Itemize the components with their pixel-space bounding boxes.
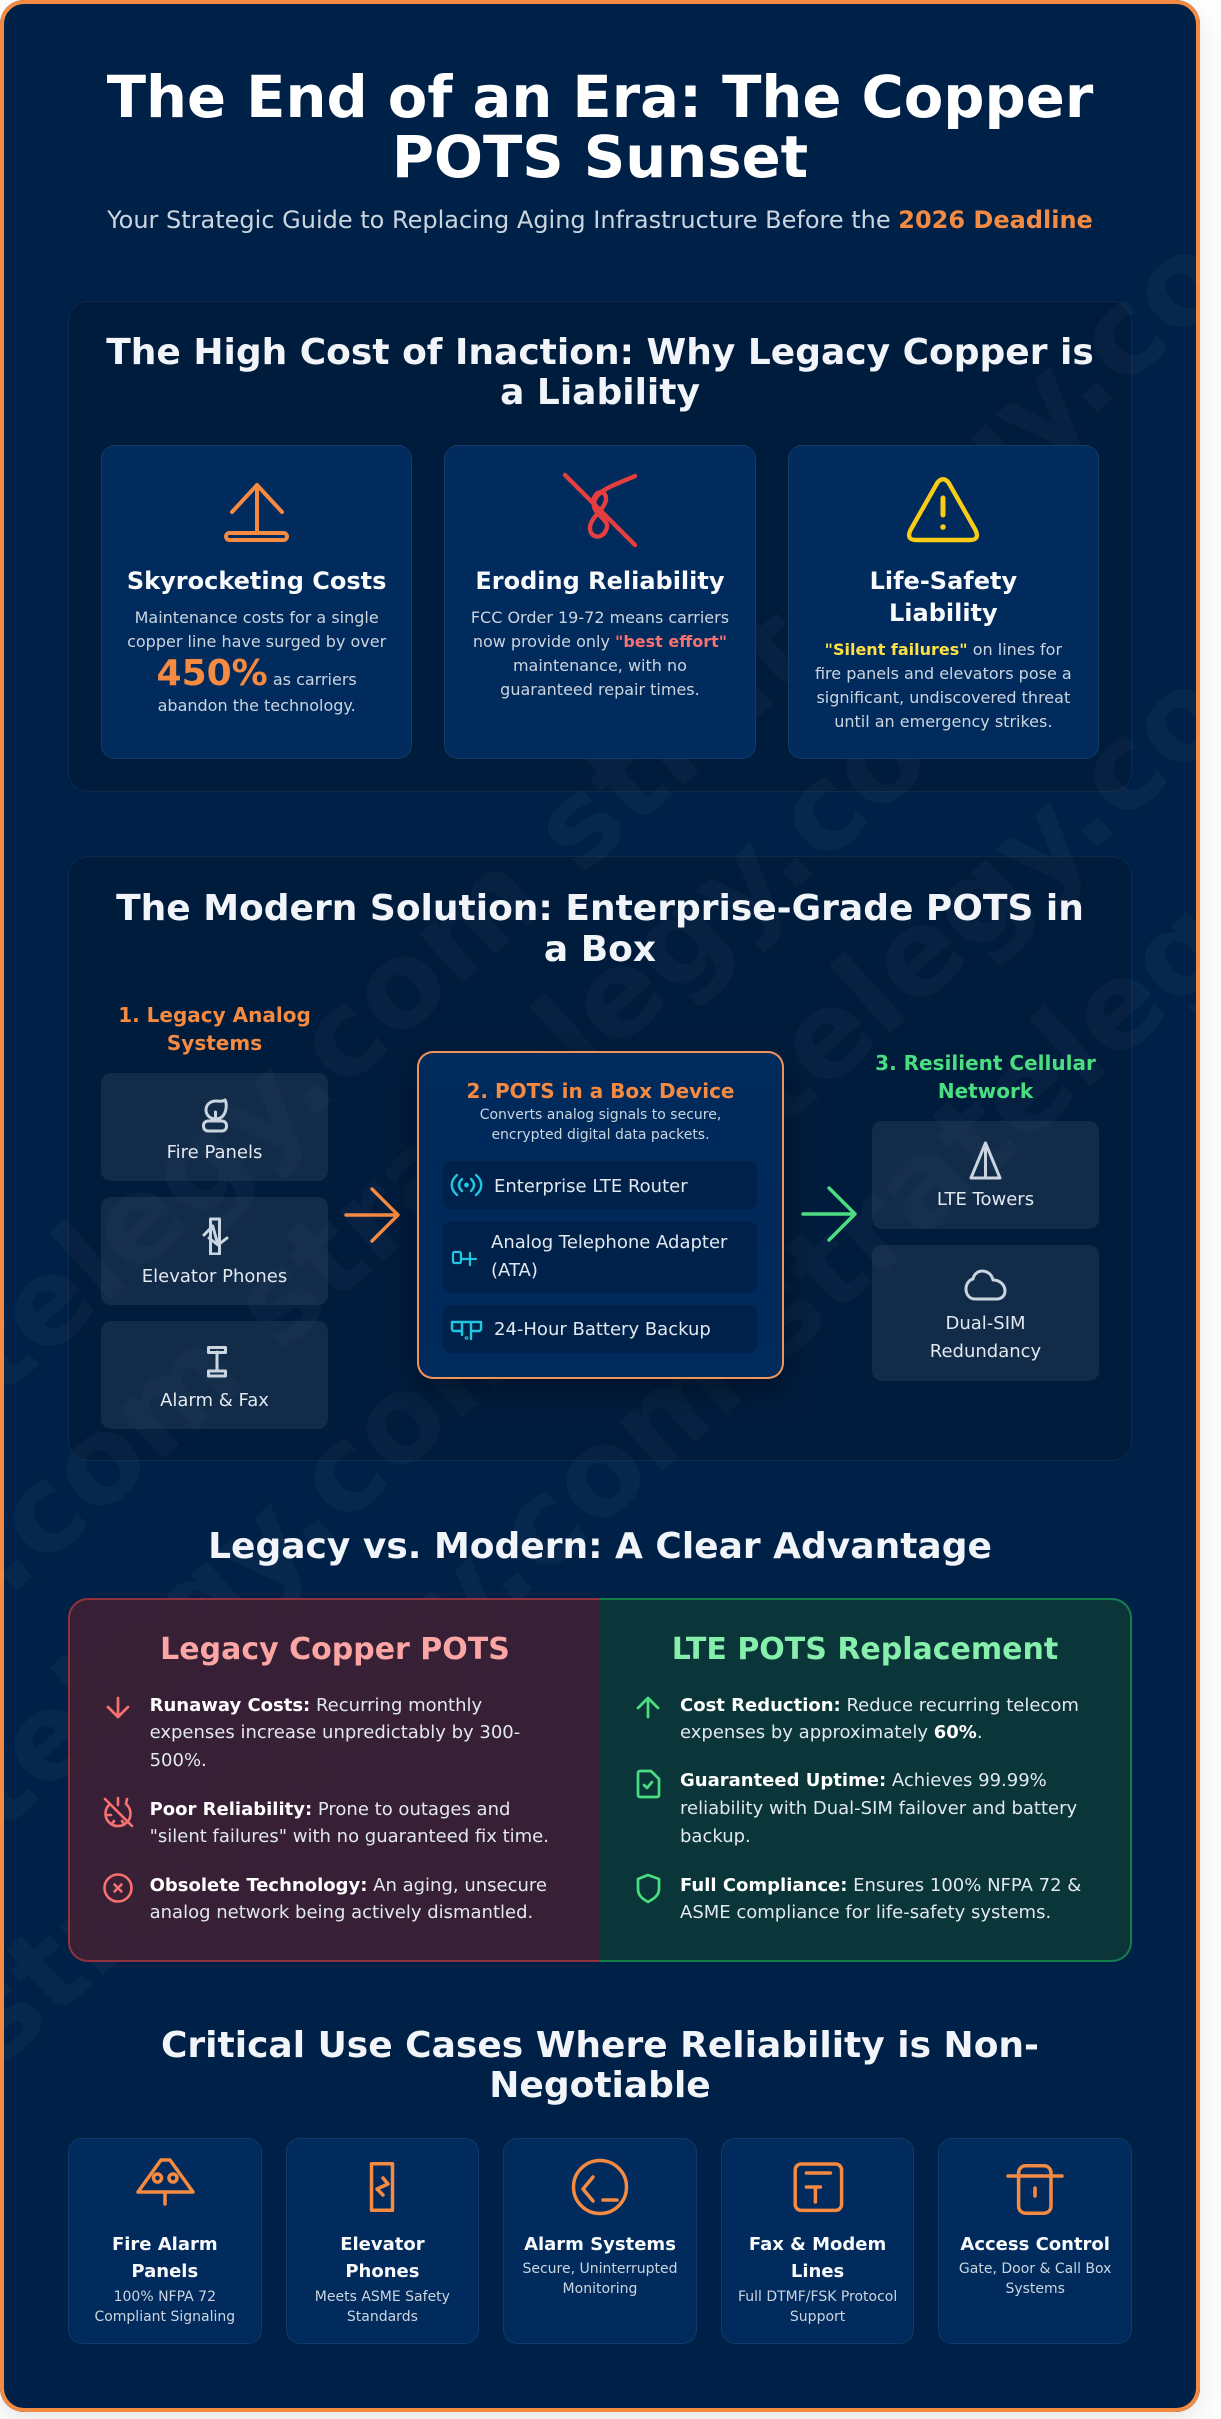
card text (938, 2259, 1132, 2299)
label: LTE Towers (937, 1189, 1034, 1210)
heading: critical use cases: Negotiable (489, 2064, 711, 2106)
row label: Enterprise LTE Router (494, 1176, 688, 1196)
heading: The High Cost of Inaction: Why Legacy Copper is (106, 332, 1094, 373)
item: runaway costs (150, 1695, 520, 1771)
heading: critical use cases (0, 2026, 1200, 2106)
row: ATA (443, 1221, 757, 1293)
item: full compliance (680, 1872, 1081, 1927)
subtitle: Your Strategic Guide to Replacing Aging Infrastructure Before the 2026 Deadline (107, 206, 1093, 234)
box: LTE towers (872, 1121, 1099, 1229)
icon: warning triangle (906, 477, 980, 542)
item: cost reduction: expenses by approximately 60%. (680, 1722, 983, 1743)
label: Alarm & Fax (160, 1390, 269, 1410)
card: alarm systems (503, 2138, 697, 2344)
card: fire alarm panels (68, 2138, 262, 2344)
heading: a Liability (500, 372, 700, 413)
heading (116, 888, 1084, 970)
card text: until an emergency strikes. (834, 712, 1052, 731)
card title: Lines (791, 2261, 844, 2282)
panel: use cases (68, 2138, 1132, 2344)
card title: Liability (889, 599, 998, 627)
icon: elevator (202, 1218, 229, 1255)
icon: upload arrow (224, 482, 289, 542)
column heading: resilient cellular network (875, 1051, 1096, 1103)
icon: x circle (103, 1873, 133, 1903)
item: poor reliability: Poor Reliability: Prone to outages and (150, 1799, 510, 1820)
icon: cloud (964, 1270, 1006, 1300)
column heading: legacy analog systems (118, 1003, 311, 1055)
item: runaway costs: expenses increase unpredictably by 300- (150, 1722, 520, 1743)
stat: 450%: 450% as carriers (157, 652, 357, 694)
item: obsolete technology (150, 1875, 547, 1923)
item: guaranteed uptime: Guaranteed Uptime: Achieves 99.99% (680, 1770, 1047, 1791)
label: Dual-SIM (945, 1313, 1026, 1334)
header (107, 64, 1094, 234)
column heading: legacy analog systems: Systems (167, 1031, 262, 1055)
arrow: device to network (801, 1186, 857, 1242)
card title: Access Control (960, 2234, 1110, 2254)
box: alarm and fax (101, 1321, 328, 1429)
item: obsolete technology: analog network being actively dismantled. (150, 1902, 533, 1923)
row label: Analog Telephone Adapter (491, 1232, 727, 1253)
icon: adapter (452, 1250, 478, 1266)
card title (721, 2230, 914, 2286)
card text: now provide only "best effort" (473, 632, 727, 651)
icon: down arrow (106, 1696, 130, 1718)
title (107, 64, 1094, 191)
row: LTE router (443, 1161, 757, 1209)
card: access control (938, 2138, 1132, 2344)
card text: 100% NFPA 72 (114, 2289, 216, 2305)
panel: comparison (68, 1598, 1132, 1962)
card text: Meets ASME Safety (315, 2289, 450, 2305)
card title: Fax & Modem (749, 2234, 886, 2254)
item: obsolete technology: Obsolete Technology: An aging, unsecure (150, 1875, 547, 1896)
card: eroding reliability (444, 445, 756, 759)
arrow: legacy to device (344, 1187, 400, 1243)
icon: elevator phone (350, 2154, 414, 2218)
card text: Systems (1005, 2281, 1065, 2297)
item: runaway costs: Runaway Costs: Recurring monthly (150, 1695, 482, 1716)
item: full compliance: ASME compliance for life-safety systems. (680, 1902, 1051, 1923)
item: guaranteed uptime (680, 1770, 1077, 1847)
title: The End of an Era: The Copper (107, 64, 1093, 130)
card text: copper line have surged by over (127, 632, 386, 651)
card text: fire panels and elevators pose a (815, 664, 1072, 683)
card text: Support (790, 2309, 845, 2325)
device description: Converts analog signals to secure, (480, 1107, 721, 1123)
card title: Fire Alarm (112, 2234, 218, 2254)
box: fire panels (101, 1073, 328, 1181)
card text: Monitoring (563, 2281, 637, 2297)
card title: Skyrocketing Costs (127, 567, 386, 595)
item: guaranteed uptime: reliability with Dual-SIM failover and battery (680, 1798, 1077, 1819)
column: legacy copper POTS (68, 1598, 600, 1962)
card text: FCC Order 19-72 means carriers (471, 608, 729, 626)
card text (721, 2287, 914, 2327)
title: POTS Sunset (392, 124, 808, 191)
box: dual-SIM redundancy (872, 1245, 1099, 1381)
card text: "Silent failures" on lines for (825, 640, 1062, 658)
card text (286, 2287, 479, 2327)
column heading: resilient cellular network: 3. Resilient Cellular (875, 1051, 1096, 1075)
icon: shield (636, 1874, 660, 1904)
heading (106, 332, 1094, 413)
item: cost reduction: Cost Reduction: Reduce recurring telecom (680, 1695, 1079, 1716)
row label: 24-Hour Battery Backup (494, 1319, 711, 1340)
row: battery backup (443, 1305, 757, 1353)
icon: battery (450, 1320, 482, 1340)
card text (471, 608, 729, 699)
heading: critical use cases: Critical Use Cases Where Reliability is Non- (161, 2024, 1039, 2066)
icon: checked document (636, 1770, 660, 1798)
row label: (ATA) (491, 1260, 538, 1281)
card text: Secure, Uninterrupted (522, 2261, 678, 2277)
card text (127, 608, 386, 651)
icon: fax (786, 2154, 850, 2218)
device description: encrypted digital data packets. (491, 1127, 710, 1143)
icon: terminal circle (568, 2154, 632, 2218)
card: fax and modem lines (721, 2138, 914, 2344)
card title: Panels (131, 2261, 198, 2282)
icon: broken knot (562, 472, 638, 548)
box: elevator phones (101, 1197, 328, 1305)
card text: Gate, Door & Call Box (959, 2261, 1111, 2277)
heading: a Box (544, 928, 656, 970)
icon: tower (970, 1142, 1002, 1180)
item: guaranteed uptime: backup. (680, 1826, 751, 1847)
card text (815, 640, 1072, 731)
icon: broken gauge (104, 1796, 134, 1828)
icon: fire alarm (133, 2154, 197, 2218)
card title (286, 2230, 479, 2286)
card text: maintenance, with no (513, 656, 687, 675)
icon: access gate (1003, 2154, 1067, 2218)
card title: Phones (345, 2261, 419, 2282)
item: full compliance: Full Compliance: Ensures 100% NFPA 72 & (680, 1875, 1081, 1896)
panel: high cost of inaction (68, 301, 1132, 792)
item: poor reliability: "silent failures" with no guaranteed fix time. (150, 1826, 549, 1847)
device description (480, 1107, 721, 1143)
column heading: legacy analog systems: 1. Legacy Analog (118, 1003, 311, 1027)
panel: pots in a box device (417, 1051, 784, 1379)
column title: Legacy Copper POTS (160, 1632, 510, 1666)
panel: modern solution (68, 856, 1132, 1461)
row label (491, 1232, 728, 1281)
device title: 2. POTS in a Box Device (466, 1078, 734, 1102)
card: skyrocketing costs (101, 445, 412, 759)
column title: LTE POTS Replacement (672, 1632, 1058, 1666)
card: elevator phones (286, 2138, 479, 2344)
card text: guaranteed repair times. (500, 680, 700, 699)
card text: Standards (347, 2309, 418, 2325)
column: LTE POTS replacement (600, 1598, 1132, 1962)
card text end: abandon the technology. (158, 696, 356, 715)
card title: Alarm Systems (524, 2234, 676, 2254)
card text: Maintenance costs for a single (135, 608, 379, 626)
heading: The Modern Solution: Enterprise-Grade POTS in (116, 888, 1084, 929)
card text: significant, undiscovered threat (816, 688, 1070, 707)
heading: legacy vs modern: Legacy vs. Modern: A Clear Advantage (208, 1526, 992, 1567)
card title: Life-Safety (870, 567, 1017, 595)
card title: Eroding Reliability (475, 567, 725, 595)
item: cost reduction (680, 1695, 1079, 1743)
card title: Elevator (340, 2234, 425, 2254)
icon: alarm (207, 1346, 227, 1378)
icon: antenna (450, 1174, 482, 1196)
item: poor reliability (150, 1799, 549, 1847)
card title (68, 2230, 262, 2286)
card text: Full DTMF/FSK Protocol (738, 2289, 897, 2305)
card: life-safety liability (788, 445, 1099, 759)
label: Fire Panels (167, 1142, 262, 1162)
label: Redundancy (930, 1341, 1041, 1362)
icon: up arrow (636, 1696, 660, 1718)
card text: Compliant Signaling (94, 2309, 235, 2325)
column heading: resilient cellular network: Network (938, 1079, 1033, 1103)
item: runaway costs: 500%. (150, 1750, 207, 1771)
card title (870, 567, 1017, 627)
icon: fire panel (202, 1098, 228, 1132)
label: Elevator Phones (142, 1266, 287, 1286)
card text (503, 2259, 697, 2299)
card text (68, 2287, 262, 2327)
label (930, 1313, 1041, 1362)
